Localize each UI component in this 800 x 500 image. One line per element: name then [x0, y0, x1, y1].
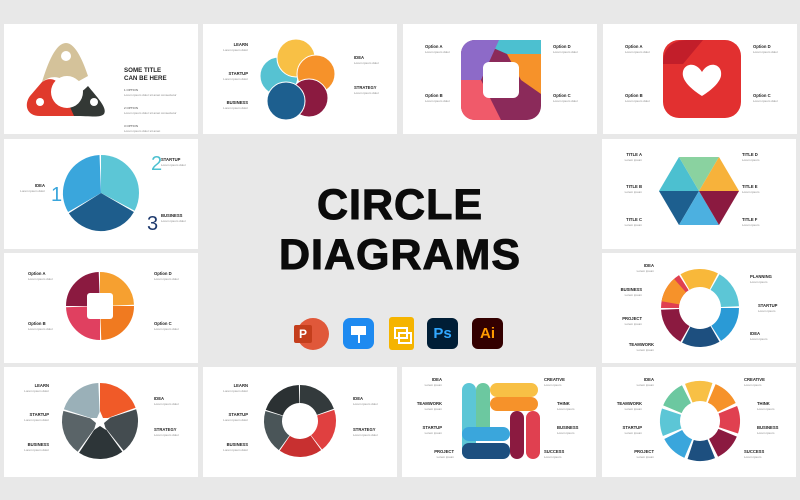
labels: Lorem ipsum	[637, 455, 654, 459]
text: title and options: 2 OPTION	[124, 106, 138, 110]
labels: Option D	[753, 44, 771, 49]
labels: Lorem ipsum dolor	[24, 389, 49, 393]
labels: TITLE D	[742, 152, 758, 157]
labels: STARTUP	[229, 412, 248, 417]
diagram: hexagon	[659, 157, 739, 225]
labels: Option B	[425, 93, 443, 98]
diagram: rounded square	[461, 40, 541, 120]
labels: Lorem ipsum	[625, 158, 642, 162]
text: title and options: CAN BE HERE	[124, 75, 167, 82]
card: spiral ring	[602, 253, 796, 363]
labels: Lorem ipsum dolor	[425, 50, 450, 54]
labels	[625, 44, 778, 103]
labels: Lorem ipsum	[742, 223, 760, 227]
labels	[417, 377, 579, 459]
labels: BUSINESS	[757, 425, 779, 430]
title	[279, 181, 521, 279]
labels: Option C	[154, 321, 172, 326]
diagram: square with heart	[663, 40, 741, 118]
card: hexagon of triangles	[602, 139, 796, 249]
labels: Option B	[625, 93, 643, 98]
labels: BUSINESS	[227, 100, 248, 105]
labels: Lorem ipsum dolor	[354, 61, 379, 65]
numbers and labels	[20, 153, 186, 235]
icon: keynote	[343, 318, 374, 349]
numbers and labels: Lorem ipsum dolor	[161, 163, 186, 167]
labels: Lorem ipsum	[637, 383, 654, 387]
labels: Lorem ipsum	[544, 383, 562, 387]
labels: BUSINESS	[227, 442, 248, 447]
labels: IDEA	[154, 396, 164, 401]
diagram: ring segments	[659, 267, 741, 349]
title: DIAGRAMS	[279, 231, 521, 279]
labels: Lorem ipsum dolor	[753, 50, 778, 54]
labels: Lorem ipsum dolor	[154, 402, 179, 406]
labels: Lorem ipsum dolor	[223, 77, 248, 81]
labels: LEARN	[35, 383, 49, 388]
labels: Lorem ipsum	[744, 455, 762, 459]
diagram: ring	[262, 383, 338, 459]
icon: powerpoint: P	[299, 327, 307, 341]
labels: Lorem ipsum dolor	[553, 99, 578, 103]
labels: Lorem ipsum	[425, 407, 442, 411]
labels	[24, 383, 179, 452]
labels: STARTUP	[229, 71, 248, 76]
labels: PROJECT	[434, 449, 454, 454]
labels: BUSINESS	[621, 287, 642, 292]
card: three part pie	[4, 139, 198, 249]
labels: Lorem ipsum dolor	[154, 433, 179, 437]
labels: PROJECT	[622, 316, 642, 321]
labels: STRATEGY	[154, 427, 177, 432]
card: five circles	[203, 24, 397, 134]
labels: Lorem ipsum	[625, 190, 642, 194]
numbers and labels: IDEA	[35, 183, 45, 188]
labels: SUCCESS	[544, 449, 564, 454]
labels: Lorem ipsum	[757, 407, 775, 411]
labels: Lorem ipsum dolor	[24, 448, 49, 452]
card: heart square	[603, 24, 797, 134]
labels	[28, 271, 179, 331]
labels: Lorem ipsum dolor	[154, 327, 179, 331]
labels: LEARN	[234, 42, 248, 47]
card: square swirl	[402, 367, 596, 477]
text: title and options	[124, 67, 177, 133]
labels: TITLE B	[626, 184, 642, 189]
text: title and options: Lorem ipsum dolor sit amet consectetur	[124, 111, 177, 115]
labels: Lorem ipsum	[750, 337, 768, 341]
labels: Lorem ipsum	[625, 223, 642, 227]
labels: PROJECT	[634, 449, 654, 454]
labels: Lorem ipsum dolor	[553, 50, 578, 54]
labels: STARTUP	[423, 425, 442, 430]
labels: Lorem ipsum dolor	[753, 99, 778, 103]
labels: Option A	[625, 44, 643, 49]
labels: Option A	[28, 271, 46, 276]
title: CIRCLE	[317, 181, 483, 229]
card: square cycle	[403, 24, 597, 134]
labels: Lorem ipsum	[742, 190, 760, 194]
app icons	[294, 317, 503, 350]
labels: TITLE A	[626, 152, 642, 157]
numbers and labels: 1	[51, 184, 62, 206]
labels: STRATEGY	[353, 427, 376, 432]
labels: BUSINESS	[28, 442, 49, 447]
card: octagon ring	[602, 367, 796, 477]
labels: Lorem ipsum	[625, 407, 642, 411]
card: puzzle ring	[203, 367, 397, 477]
card: star circle	[4, 367, 198, 477]
labels: Lorem ipsum	[757, 431, 775, 435]
labels: IDEA	[750, 331, 760, 336]
labels: TEAMWORK	[417, 401, 442, 406]
icon: powerpoint	[297, 318, 329, 350]
labels: Lorem ipsum	[758, 309, 776, 313]
labels: Option C	[753, 93, 771, 98]
labels: Lorem ipsum dolor	[28, 327, 53, 331]
labels: Lorem ipsum dolor	[154, 277, 179, 281]
labels: THINK	[557, 401, 570, 406]
labels: Lorem ipsum dolor	[223, 106, 248, 110]
labels: PLANNING	[750, 274, 772, 279]
labels	[223, 383, 378, 452]
labels: Lorem ipsum dolor	[425, 99, 450, 103]
diagram: five segment circle	[73, 394, 127, 448]
diagram: overlapping circles	[260, 39, 335, 120]
labels: Lorem ipsum	[425, 431, 442, 435]
card: triangle cycle	[4, 24, 198, 134]
labels: THINK	[757, 401, 770, 406]
labels: Option D	[553, 44, 571, 49]
labels	[621, 263, 778, 352]
icon: photoshop: Ps	[433, 325, 452, 342]
text: title and options: Lorem ipsum dolor sit amet consectetur	[124, 93, 177, 97]
text: title and options: 1 OPTION	[124, 88, 138, 92]
diagram: swirl bands	[462, 383, 540, 459]
diagram: circle with square hole	[83, 289, 117, 323]
icon: photoshop	[427, 318, 458, 349]
labels: Option D	[154, 271, 172, 276]
numbers and labels: BUSINESS	[161, 213, 183, 218]
labels: Lorem ipsum	[425, 383, 442, 387]
labels: Lorem ipsum	[625, 431, 642, 435]
labels: BUSINESS	[557, 425, 579, 430]
labels: LEARN	[234, 383, 248, 388]
icon: illustrator: Ai	[480, 325, 495, 342]
labels: Lorem ipsum dolor	[354, 91, 379, 95]
diagram: eight segments	[661, 382, 739, 460]
diagram: triangle three parts	[27, 43, 105, 116]
labels: Lorem ipsum dolor	[223, 448, 248, 452]
labels: Lorem ipsum	[544, 455, 562, 459]
card: four part circle	[4, 253, 198, 363]
labels: IDEA	[432, 377, 442, 382]
labels: TITLE C	[626, 217, 642, 222]
labels: Lorem ipsum dolor	[28, 277, 53, 281]
labels: TEAMWORK	[617, 401, 642, 406]
labels: Lorem ipsum dolor	[625, 50, 650, 54]
labels	[617, 377, 779, 459]
diagram: pie	[75, 167, 127, 219]
text: title and options: SOME TITLE	[124, 67, 161, 74]
numbers and labels: 2	[151, 153, 162, 175]
labels: Lorem ipsum	[557, 431, 575, 435]
labels: Lorem ipsum dolor	[223, 48, 248, 52]
labels: Option B	[28, 321, 46, 326]
labels: STARTUP	[30, 412, 49, 417]
numbers and labels: Lorem ipsum dolor	[20, 189, 45, 193]
labels: Option C	[553, 93, 571, 98]
labels: Lorem ipsum	[742, 158, 760, 162]
labels: TITLE F	[742, 217, 758, 222]
icon: illustrator	[472, 318, 503, 349]
labels: TEAMWORK	[629, 342, 654, 347]
labels	[425, 44, 578, 103]
labels: Lorem ipsum	[637, 348, 654, 352]
labels: Lorem ipsum	[744, 383, 762, 387]
labels: IDEA	[353, 396, 363, 401]
labels: STARTUP	[758, 303, 778, 308]
text: title and options: Lorem ipsum dolor sit amet	[124, 129, 160, 133]
labels: Lorem ipsum dolor	[24, 418, 49, 422]
labels: IDEA	[644, 263, 654, 268]
labels: Lorem ipsum dolor	[353, 433, 378, 437]
icon: google slides	[389, 317, 414, 350]
numbers and labels: Lorem ipsum dolor	[161, 219, 186, 223]
labels: IDEA	[644, 377, 654, 382]
labels: Lorem ipsum dolor	[625, 99, 650, 103]
labels: CREATIVE	[544, 377, 565, 382]
numbers and labels: 3	[147, 213, 158, 235]
labels: Lorem ipsum dolor	[353, 402, 378, 406]
labels: Lorem ipsum	[625, 293, 642, 297]
labels: Lorem ipsum dolor	[223, 418, 248, 422]
labels: SUCCESS	[744, 449, 764, 454]
labels	[625, 152, 760, 227]
labels	[223, 42, 379, 110]
labels: CREATIVE	[744, 377, 765, 382]
text: title and options: 3 OPTION	[124, 124, 138, 128]
labels: TITLE E	[742, 184, 758, 189]
labels: Lorem ipsum	[557, 407, 575, 411]
labels: Option A	[425, 44, 443, 49]
labels: Lorem ipsum	[625, 322, 642, 326]
labels: Lorem ipsum	[437, 455, 454, 459]
labels: IDEA	[354, 55, 364, 60]
labels: Lorem ipsum	[750, 280, 768, 284]
numbers and labels: STARTUP	[161, 157, 181, 162]
labels: Lorem ipsum	[637, 269, 654, 273]
labels: STARTUP	[623, 425, 642, 430]
labels: Lorem ipsum dolor	[223, 389, 248, 393]
labels: STRATEGY	[354, 85, 377, 90]
